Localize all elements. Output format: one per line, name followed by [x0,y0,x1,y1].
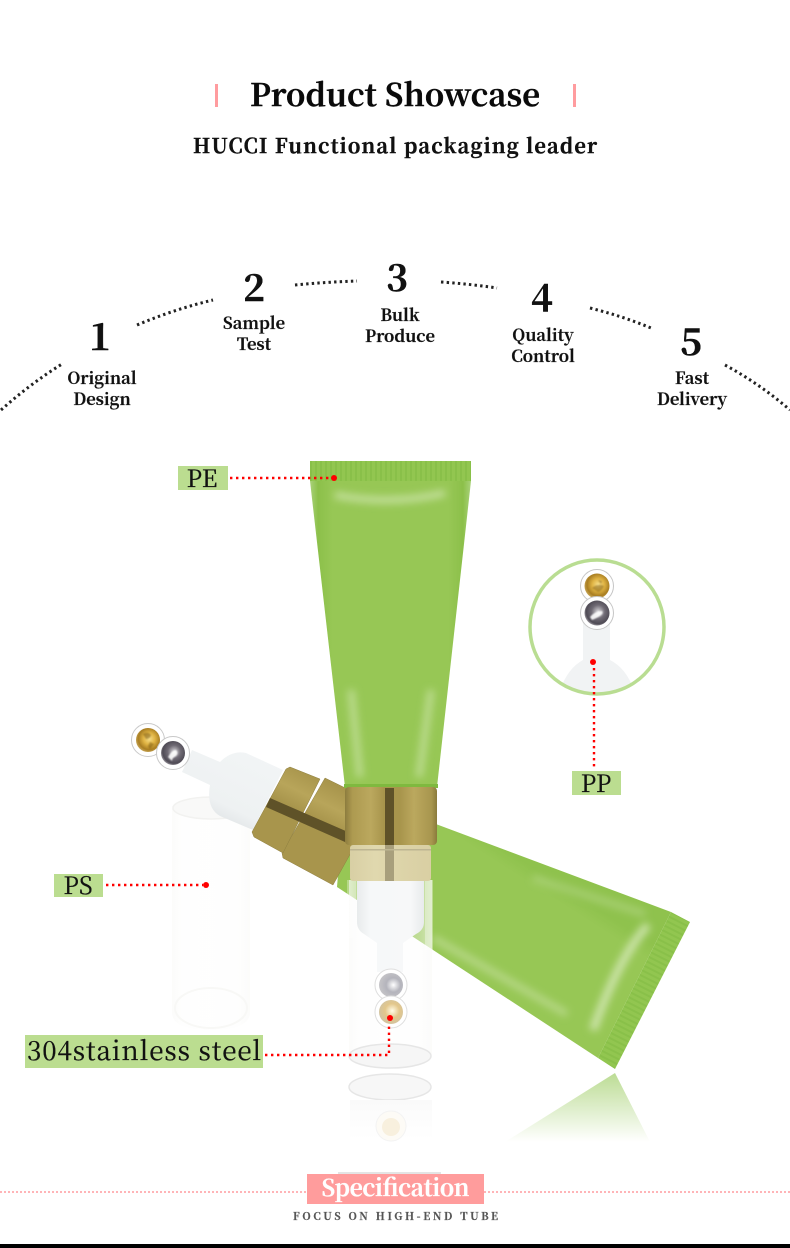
specification footer [0,1170,790,1224]
gold collar first ring [252,767,320,853]
subtitle: HUCCI Functional packaging leader [193,130,597,159]
dotted rule [0,1191,790,1193]
callout: PP [572,659,621,799]
inset balls [580,570,614,630]
process arc with five steps [1,248,790,410]
step 1: Original [67,365,137,389]
bottom bar [0,1244,790,1248]
upright clear sleeve [347,880,433,1068]
tube body [337,790,671,1058]
callout: PE: PE [187,459,217,494]
step 4: Control [511,343,575,367]
step 5: 5 [680,312,702,366]
step 4 [511,268,575,367]
specification label [307,1174,484,1204]
dotted arc segments [1,281,790,410]
sleeve reflection [349,1074,432,1141]
callout: 304 stainless steel: 304stainless steel [27,1031,261,1068]
rotated tube [337,790,690,1069]
specification footer: Specification [322,1170,470,1203]
highlights [335,493,445,777]
crimped end [598,912,690,1069]
step 3: Bulk [380,302,420,326]
detail circle inset [530,560,664,700]
title: Product Showcase [250,70,540,115]
highlights [433,878,648,1030]
step 4: Quality [512,322,574,346]
callout: PS: PS [63,866,93,901]
clear cap standing at left [172,797,250,1030]
step 1 [67,307,137,410]
step 1: Design [73,386,131,410]
step 5 [657,312,728,410]
step 2 [223,258,285,355]
inset applicator [564,623,631,692]
step 5: Delivery [657,386,728,410]
title block [193,70,597,159]
upright applicator [357,881,424,1028]
rotated applicator [132,724,378,885]
shoulder line [344,784,438,788]
callout: PS [54,866,209,901]
translucent ring [350,845,431,881]
callout: PE [178,459,337,494]
footer tagline: FOCUS ON HIGH-END TUBE [293,1209,498,1224]
step 4: 4 [531,268,553,322]
title bar right [573,84,576,107]
applicator body [357,881,424,972]
tube body [310,481,471,787]
collar stripe [385,788,394,845]
step 3: Produce [365,323,435,347]
step 2: 2 [243,258,265,312]
callout: PP: PP [581,764,611,799]
gold collar second ring [282,778,378,885]
upright gold collar [345,787,437,881]
callout: 304 stainless steel [25,1015,393,1068]
step 5: Fast [675,365,710,389]
step 2: Test [237,331,272,355]
step 1: 1 [89,307,111,361]
ball pair [375,969,407,1028]
crimped end [310,461,471,481]
step 3: 3 [386,248,408,302]
title bar left [215,84,218,107]
upright tube [310,461,471,788]
specification ghost [338,1172,441,1175]
collar dark stripe [266,798,348,842]
step 2: Sample [223,310,285,334]
applicator neck and cap [182,750,283,830]
step 3 [365,248,435,347]
inset ring [530,560,664,694]
ball pair [132,724,190,770]
tube reflection [505,1073,650,1142]
